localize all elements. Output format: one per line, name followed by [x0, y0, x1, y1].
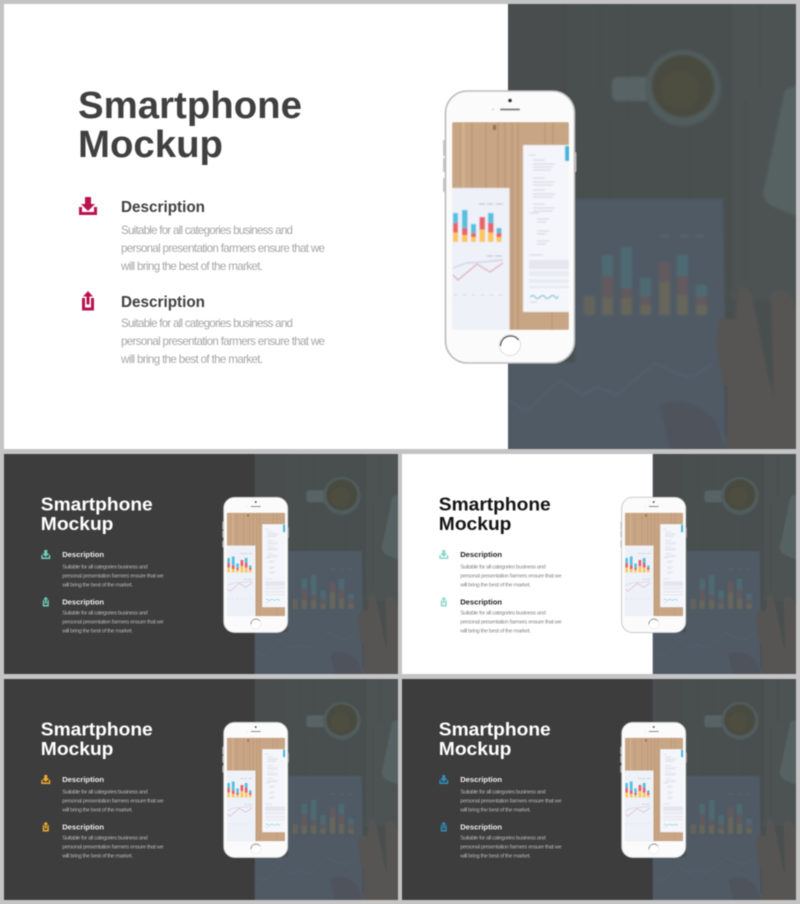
item text: description 1: Suitable for all categories business and	[460, 564, 546, 570]
item text: description 2: Suitable for all categories business and	[460, 836, 546, 842]
icon: download	[41, 550, 50, 559]
item text: description 2: personal presentation farmers ensure that we	[121, 335, 325, 348]
title: Mockup	[41, 739, 113, 760]
icon: share	[441, 822, 447, 831]
item text: description 2: will bring the best of the market.	[61, 629, 133, 635]
item heading: description 2: Description	[121, 294, 205, 311]
item text: description 1: will bring the best of the market.	[61, 807, 133, 813]
panel: dark slide with teal icons	[3, 453, 399, 675]
item text: description 2: will bring the best of the market.	[459, 854, 531, 860]
item heading: description 1: Description	[62, 550, 104, 559]
item text: description 2: personal presentation farmers ensure that we	[460, 620, 562, 626]
icon: share	[43, 822, 49, 831]
item text: description 1: Suitable for all categories business and	[62, 564, 148, 570]
panel: white slide with teal icons	[402, 453, 797, 675]
item heading: description 2: Description	[460, 598, 502, 607]
background desk photo and phone mockup	[222, 677, 400, 903]
background desk photo and phone mockup	[620, 677, 798, 903]
item text: description 2: will bring the best of the market.	[459, 629, 531, 635]
item text: description 1: personal presentation farmers ensure that we	[460, 573, 562, 579]
item text: description 2: Suitable for all categories business and	[62, 836, 148, 842]
panel: dark slide with orange icons	[3, 678, 399, 901]
title: Smartphone	[439, 495, 551, 516]
background desk photo and phone mockup	[620, 452, 798, 678]
title: Smartphone	[78, 85, 302, 127]
title: Smartphone	[41, 720, 153, 741]
item text: description 2: Suitable for all categories business and	[460, 611, 546, 617]
item text: description 1: Suitable for all categories business and	[460, 789, 546, 795]
item text: description 2: Suitable for all categories business and	[121, 317, 293, 330]
item text: description 1: personal presentation farmers ensure that we	[62, 798, 164, 804]
title: Smartphone	[439, 720, 551, 741]
icon: share	[82, 291, 94, 310]
title: Mockup	[78, 124, 223, 166]
item heading: description 2: Description	[460, 823, 502, 832]
item heading: description 2: Description	[62, 823, 104, 832]
title: Mockup	[439, 739, 511, 760]
title: Mockup	[41, 514, 113, 535]
title: Smartphone	[41, 495, 153, 516]
icon: share	[43, 597, 49, 606]
item text: description 1: Suitable for all categories business and	[62, 789, 148, 795]
item text: description 2: will bring the best of the market.	[61, 854, 133, 860]
panel: large white slide	[4, 0, 800, 455]
item text: description 1: personal presentation farmers ensure that we	[460, 798, 562, 804]
icon: download	[79, 197, 97, 215]
item heading: description 2: Description	[62, 598, 104, 607]
background desk photo and phone mockup	[443, 0, 800, 455]
item heading: description 1: Description	[460, 550, 502, 559]
icon: download	[41, 775, 50, 784]
item text: description 2: will bring the best of the market.	[120, 353, 263, 366]
icon: download	[439, 550, 448, 559]
item text: description 1: will bring the best of the market.	[61, 582, 133, 588]
item text: description 2: personal presentation farmers ensure that we	[460, 845, 562, 851]
background desk photo and phone mockup	[222, 452, 400, 678]
icon: share	[441, 597, 447, 606]
item text: description 2: Suitable for all categories business and	[62, 611, 148, 617]
item text: description 1: will bring the best of the market.	[459, 582, 531, 588]
panel: dark slide with blue icons	[401, 678, 797, 901]
item heading: description 1: Description	[460, 775, 502, 784]
item text: description 2: personal presentation farmers ensure that we	[62, 845, 164, 851]
item text: description 1: will bring the best of the market.	[459, 807, 531, 813]
item text: description 1: Suitable for all categories business and	[121, 224, 293, 237]
title: Mockup	[439, 514, 511, 535]
item text: description 2: personal presentation farmers ensure that we	[62, 620, 164, 626]
item heading: description 1: Description	[62, 775, 104, 784]
item heading: description 1: Description	[121, 199, 205, 216]
icon: download	[439, 775, 448, 784]
item text: description 1: personal presentation farmers ensure that we	[121, 242, 325, 255]
item text: description 1: personal presentation farmers ensure that we	[62, 573, 164, 579]
item text: description 1: will bring the best of the market.	[120, 260, 263, 273]
